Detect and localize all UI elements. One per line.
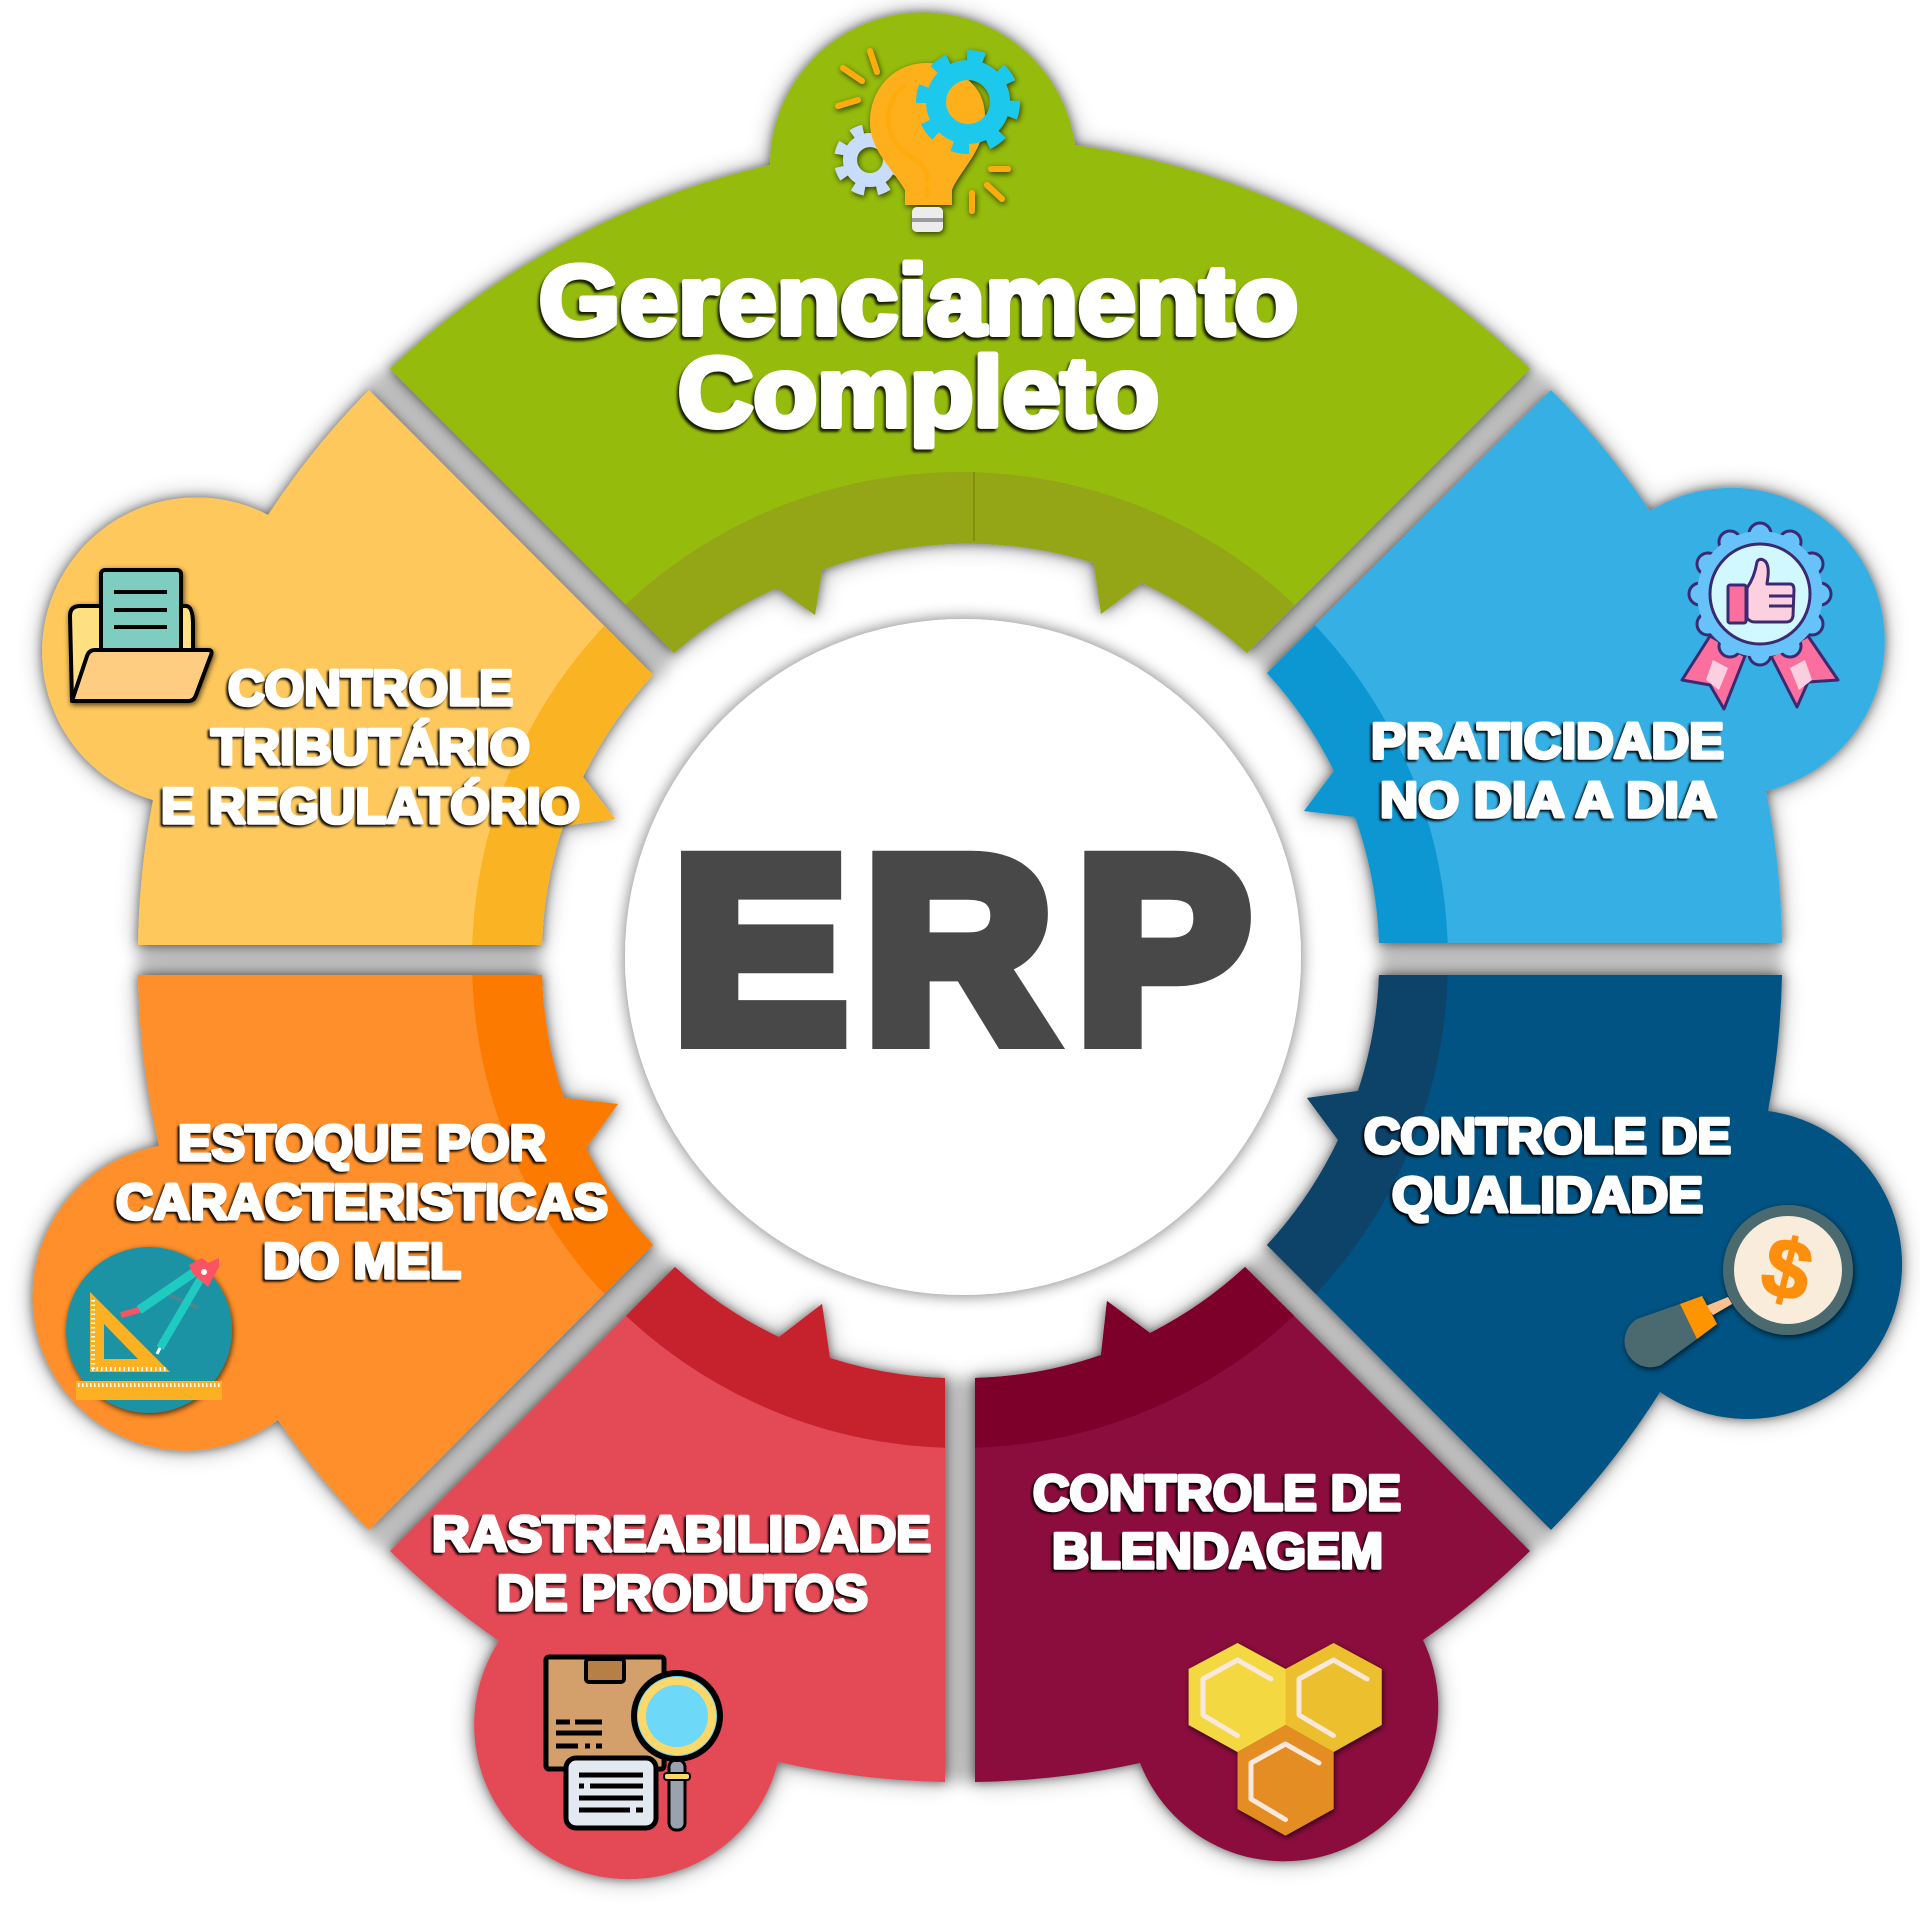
text: Controle Tributário e Regulatório: E REGULATÓRIO [161,778,580,834]
heading: Gerenciamento Completo [539,245,1298,447]
text: Praticidade no dia a dia: NO DIA A DIA [1380,772,1717,828]
dollar sign: $ [1753,1218,1821,1320]
center circle [625,619,1301,1295]
text: Controle Tributário e Regulatório: TRIBUTÁRIO [211,719,530,775]
text: Controle de blendagem: BLENDAGEM [1052,1523,1383,1579]
heading: Gerenciamento Completo: Completo [678,337,1159,447]
panel: orange, Estoque [18,962,662,1538]
text: Controle de blendagem [1033,1465,1401,1579]
heading: Gerenciamento Completo: Gerenciamento [539,245,1298,355]
text: Controle Tributário e Regulatório [161,660,580,834]
panel: red, Rastreabilidade [381,1258,959,1894]
text: Praticidade no dia a dia [1371,713,1724,828]
icon: magnifying glass with dollar [1625,1205,1853,1367]
panel: yellow, Controle Tributário [28,382,662,1518]
center title: ERP: ERP [674,805,1250,1094]
icon: honeycomb [1189,1643,1382,1836]
text: Controle Tributário e Regulatório: CONTROLE [228,660,513,716]
icon: folder with document [70,570,212,701]
text: Estoque por características do mel [116,1115,608,1289]
text: Controle de qualidade: CONTROLE DE [1364,1108,1731,1164]
panel: blue, Praticidade [1258,381,1899,956]
panel: navy, Controle de Qualidade [1258,962,1916,1538]
text: Rastreabilidade de produtos: RASTREABILIDADE [432,1506,931,1562]
text: Praticidade no dia a dia: PRATICIDADE [1371,713,1724,769]
icon: box, label and magnifier [546,1657,720,1830]
text: Estoque por características do mel: DO MEL [263,1233,461,1289]
panel: maroon, Controle de Blendagem [961,1258,1539,1876]
icon: lightbulb with gears [834,51,1015,232]
icon: compass and set square on teal circle [66,1247,232,1413]
text: Estoque por características do mel: ESTOQUE POR [178,1115,546,1171]
panel: green, Gerenciamento Completo [390,12,1530,1448]
text: Rastreabilidade de produtos: DE PRODUTOS [497,1565,868,1621]
text: Estoque por características do mel: CARACTERISTICAS [116,1174,608,1230]
icon: medal with thumbs up [1682,523,1838,709]
text: Controle de qualidade [1364,1108,1731,1223]
text: Rastreabilidade de produtos [432,1506,931,1621]
text: Controle de qualidade: QUALIDADE [1392,1167,1703,1223]
text: Controle de blendagem: CONTROLE DE [1033,1465,1401,1521]
